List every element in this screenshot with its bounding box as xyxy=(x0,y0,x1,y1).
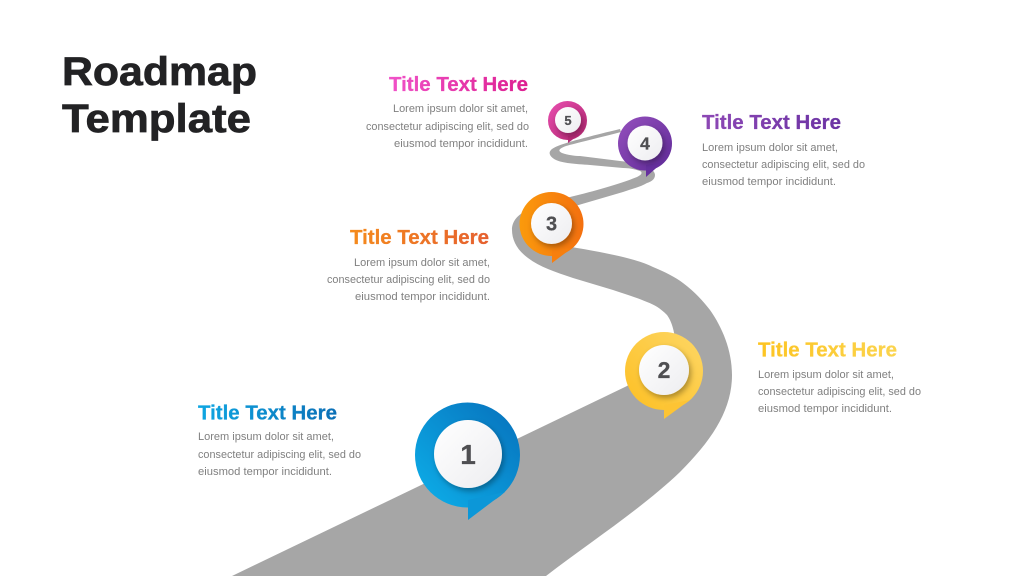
text block 1: Title Text Here xyxy=(198,402,337,424)
text block 4: consectetur adipiscing elit, sed do xyxy=(702,159,865,171)
text block 2: Lorem ipsum dolor sit amet, xyxy=(758,369,894,381)
pin 1: 1 xyxy=(460,439,476,470)
text block 1 xyxy=(198,402,361,478)
text block 5: eiusmod tempor incididunt. xyxy=(394,138,528,150)
pin 3: 3 xyxy=(546,214,557,236)
pin 3 xyxy=(520,192,584,263)
title: Template xyxy=(62,97,251,141)
pin 1 xyxy=(415,402,520,520)
text block 5 xyxy=(366,74,529,150)
pin 4: 4 xyxy=(640,134,650,154)
pin 2: 2 xyxy=(658,357,670,383)
text block 5: Title Text Here xyxy=(389,74,528,96)
text block 2: eiusmod tempor incididunt. xyxy=(758,403,892,415)
text block 1: eiusmod tempor incididunt. xyxy=(198,466,332,478)
text block 3: consectetur adipiscing elit, sed do xyxy=(327,274,490,286)
text block 5: Lorem ipsum dolor sit amet, xyxy=(393,103,528,115)
text block 2 xyxy=(758,340,921,415)
pin 4 xyxy=(618,116,672,177)
text block 4: Title Text Here xyxy=(702,112,841,134)
text block 5: consectetur adipiscing elit, sed do xyxy=(366,121,529,133)
pin 5: 5 xyxy=(564,113,572,128)
text block 3 xyxy=(327,227,490,303)
text block 1: Lorem ipsum dolor sit amet, xyxy=(198,431,334,443)
text block 3: Title Text Here xyxy=(350,227,489,249)
text block 3: eiusmod tempor incididunt. xyxy=(355,291,490,303)
text block 1: consectetur adipiscing elit, sed do xyxy=(198,449,361,461)
winding road xyxy=(232,129,732,576)
pin 2 xyxy=(625,332,703,419)
title: Roadmap xyxy=(62,50,257,94)
text block 2: Title Text Here xyxy=(758,340,897,362)
text block 4: Lorem ipsum dolor sit amet, xyxy=(702,142,838,154)
text block 4 xyxy=(702,112,865,188)
pin 5 xyxy=(548,101,587,143)
text block 3: Lorem ipsum dolor sit amet, xyxy=(354,257,490,269)
text block 2: consectetur adipiscing elit, sed do xyxy=(758,386,921,398)
title xyxy=(62,50,257,141)
text block 4: eiusmod tempor incididunt. xyxy=(702,176,836,188)
